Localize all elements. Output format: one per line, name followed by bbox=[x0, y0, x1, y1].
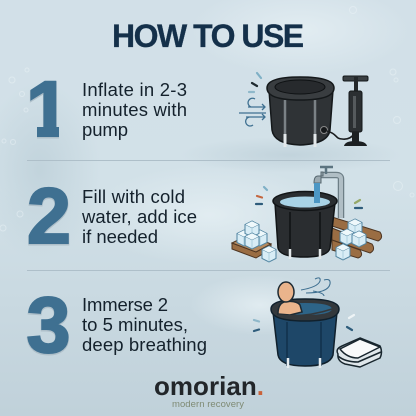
step 2 text: water, add ice bbox=[81, 206, 197, 227]
pallet of ice bbox=[232, 221, 276, 262]
icon: person in tub with towel bbox=[254, 278, 382, 368]
tub bbox=[275, 203, 335, 257]
divider bbox=[27, 160, 390, 162]
tub bbox=[273, 312, 337, 366]
step 3 row bbox=[27, 278, 382, 370]
tub bbox=[269, 90, 333, 145]
title: HOW TO USE bbox=[112, 18, 304, 54]
breath lines bbox=[301, 278, 330, 296]
tagline: modern recovery bbox=[172, 399, 244, 410]
number 1: 1 bbox=[26, 64, 70, 153]
water stream bbox=[314, 183, 320, 203]
step 3 text bbox=[82, 294, 207, 355]
sparks bbox=[254, 315, 354, 331]
hose bbox=[327, 131, 354, 139]
number 2: 2 bbox=[27, 172, 71, 261]
pump bbox=[343, 76, 368, 146]
step 1 text: minutes with bbox=[82, 99, 187, 120]
number 2: 2 bbox=[27, 171, 71, 260]
icon: tub with faucet, ice and logs bbox=[232, 167, 382, 262]
icon: inflatable tub and pump bbox=[239, 73, 368, 147]
step 1 row bbox=[30, 72, 368, 147]
logs bbox=[332, 217, 382, 258]
pipe and faucet bbox=[314, 167, 341, 218]
towel bbox=[337, 338, 382, 367]
number 3: 3 bbox=[27, 281, 70, 370]
step 3 text: to 5 minutes, bbox=[82, 314, 188, 335]
step 1 text bbox=[82, 79, 187, 140]
step 2 text: if needed bbox=[82, 226, 158, 247]
air flow arrows bbox=[239, 98, 266, 126]
step 3 text: deep breathing bbox=[82, 334, 207, 355]
person bbox=[278, 282, 302, 315]
step 2 text: Fill with cold bbox=[82, 186, 185, 207]
divider bbox=[27, 270, 390, 272]
step 1 text: Inflate in 2-3 bbox=[82, 79, 187, 100]
step 2 row bbox=[27, 167, 382, 262]
step 3 text: Immerse 2 bbox=[82, 294, 168, 315]
number 3: 3 bbox=[27, 280, 70, 369]
number 1: 1 bbox=[26, 65, 70, 154]
step 2 text bbox=[81, 186, 197, 247]
number 1 bbox=[30, 80, 59, 138]
ice cubes bbox=[336, 219, 366, 260]
step 1 text: pump bbox=[82, 119, 128, 140]
logo bbox=[154, 371, 264, 410]
wordmark: omorian. bbox=[154, 371, 264, 401]
sparks bbox=[256, 187, 362, 208]
